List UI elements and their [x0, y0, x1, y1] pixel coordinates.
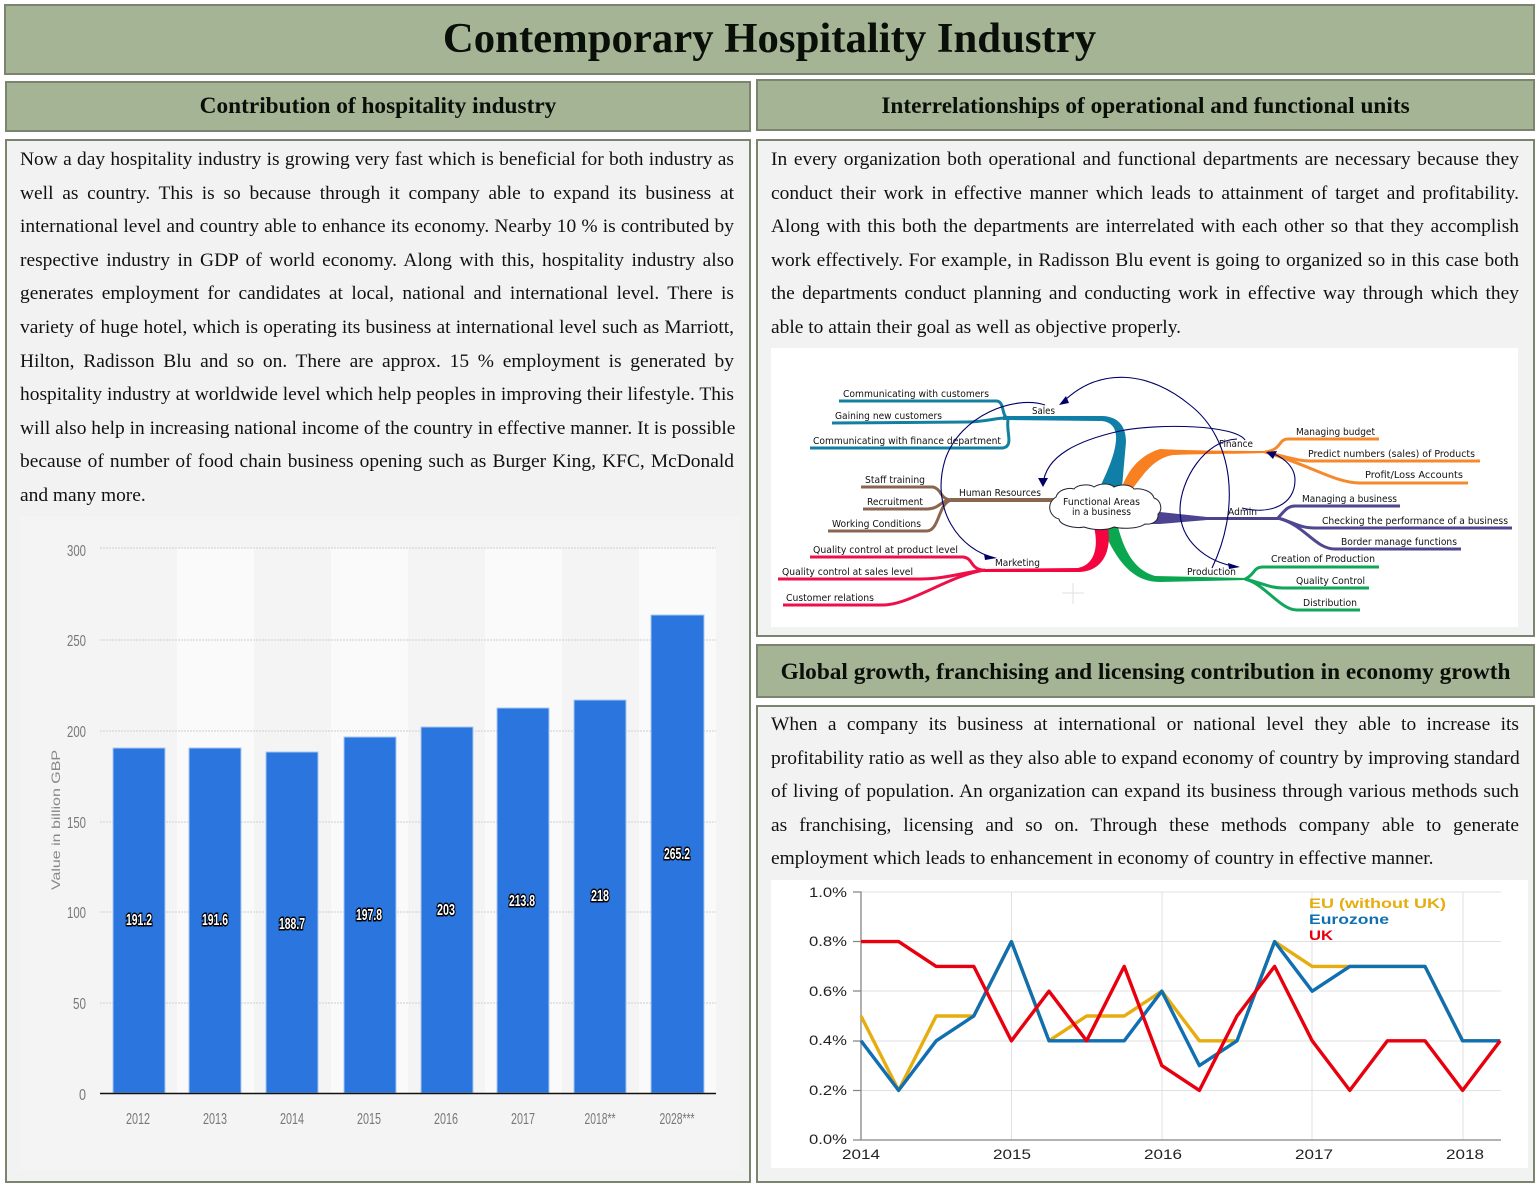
text block: contribution: and many more.: [20, 485, 146, 506]
x axis labels: 2016: [1144, 1147, 1182, 1162]
heading: interrelationships of units: Interrelationships of operational and functional units: [881, 92, 1410, 118]
text block: global growth: profitability ratio as well as they also able to expand economy of country by improving standard: [771, 748, 1520, 769]
y axis labels: 0.6%: [809, 984, 847, 999]
x axis labels: [842, 1147, 1484, 1162]
branch: marketing: Customer relations: [786, 593, 874, 604]
bar value labels: 218: [591, 888, 609, 905]
x axis labels: 2018**: [584, 1111, 616, 1128]
y axis labels: 0.8%: [809, 934, 847, 949]
y axis ticks: 100: [67, 905, 86, 922]
x axis labels: [126, 1111, 694, 1128]
y axis ticks: [67, 543, 86, 1104]
bars: [113, 615, 704, 1093]
y axis labels: 0.4%: [809, 1033, 847, 1048]
bar value labels: 191.2: [126, 912, 152, 929]
title: [4, 4, 1535, 75]
x axis labels: 2014: [280, 1111, 304, 1128]
branch: sales: Communicating with finance department: [813, 436, 1001, 447]
y axis labels: 0.2%: [809, 1083, 847, 1098]
text block: global growth: of living of population. An organization can expand its business through various methods such: [771, 781, 1519, 802]
text block: interrelationships: the departments conduct planning and conducting work in effective way through which they: [771, 283, 1519, 304]
x axis labels: 2013: [203, 1111, 227, 1128]
central cloud: Functional Areas: [1063, 497, 1140, 508]
legend: UK: [1309, 928, 1333, 943]
branch: admin: Managing a business: [1302, 494, 1397, 505]
text block: contribution: because of number of food chain business opening such as Burger King, KFC, McDonald: [20, 451, 734, 472]
text block: interrelationships: Along with this both the departments are interrelated with each other so that they accomplish: [771, 216, 1519, 237]
branch: human resources: [828, 475, 1060, 531]
text block: interrelationships: conduct their work in effective manner which leads to attainment of target and profitability.: [771, 183, 1519, 204]
x axis labels: 2012: [126, 1111, 150, 1128]
series: UK: [861, 942, 1500, 1090]
branch: production: Production: [1187, 567, 1236, 578]
branch: admin: [1135, 494, 1512, 549]
branch: production: Creation of Production: [1271, 554, 1375, 565]
branch: production: Quality Control: [1296, 576, 1365, 587]
panel: contribution body: [5, 139, 751, 1183]
text block: contribution: variety of huge hotel, which is operating its business at international level such as Marriott,: [20, 317, 734, 338]
branch: marketing: Quality control at sales level: [782, 567, 913, 578]
text block: interrelationships: work effectively. For example, in Radisson Blu event is going to organized so in this case both: [771, 250, 1519, 271]
branch: sales: Communicating with customers: [843, 389, 989, 400]
legend: [1309, 896, 1446, 943]
title: Contemporary Hospitality Industry: [443, 15, 1096, 62]
x axis labels: 2014: [842, 1147, 881, 1162]
series: EU without UK: [861, 942, 1500, 1090]
text block: interrelationships: [771, 149, 1519, 338]
y axis ticks: 50: [73, 996, 86, 1013]
legend: EU (without UK): [1309, 896, 1446, 911]
bar value labels: 203: [437, 902, 455, 919]
branch: production: Distribution: [1303, 598, 1357, 609]
x axis labels: 2017: [511, 1111, 535, 1128]
x axis labels: 2015: [357, 1111, 381, 1128]
y axis ticks: 200: [67, 724, 86, 741]
text block: contribution: well as country. This is so because through it company able to expand its business at: [20, 183, 734, 204]
bar value labels: [126, 846, 690, 933]
y axis ticks: 150: [67, 815, 86, 832]
text block: contribution: [20, 149, 735, 506]
branch: finance: Finance: [1219, 439, 1253, 450]
bar value labels: 213.8: [509, 893, 535, 910]
branch: human resources: Recruitment: [867, 497, 923, 508]
branch: finance: Profit/Loss Accounts: [1365, 470, 1463, 481]
heading: interrelationships of units: [756, 79, 1535, 131]
text block: global growth: as franchising, licensing and so on. Through these methods company able to generate: [771, 815, 1519, 836]
x axis labels: 2015: [993, 1147, 1031, 1162]
x axis labels: 2018: [1446, 1147, 1484, 1162]
branch: production: [1102, 527, 1379, 610]
series: Eurozone: [861, 942, 1500, 1090]
branch: human resources: Staff training: [865, 475, 925, 486]
y axis title: Value in billion GBP: [49, 750, 63, 890]
mind map: functional areas in a business: [771, 348, 1518, 627]
bar chart: value in billion GBP: [49, 543, 716, 1128]
branch: human resources: Human Resources: [959, 488, 1041, 499]
y axis ticks: 0: [79, 1087, 86, 1104]
panel: global growth body: [756, 705, 1535, 1183]
text block: contribution: Now a day hospitality industry is growing very fast which is beneficial for both industry as: [20, 149, 734, 170]
x axis labels: 2017: [1295, 1147, 1333, 1162]
y axis labels: 0.0%: [809, 1132, 847, 1147]
branch: admin: Checking the performance of a business: [1322, 516, 1508, 527]
y axis ticks: 250: [67, 633, 86, 650]
branch: marketing: [778, 527, 1109, 605]
branch: sales: Gaining new customers: [835, 411, 942, 422]
branch: finance: Predict numbers (sales) of Products: [1308, 449, 1475, 460]
text block: contribution: hospitality industry at worldwide level which help peoples in improving their lifestyle. This: [20, 384, 734, 405]
heading: global growth: Global growth, franchising and licensing contribution in economy growth: [781, 658, 1510, 684]
bar value labels: 188.7: [279, 916, 305, 933]
branch: admin: Border manage functions: [1341, 537, 1457, 548]
x axis labels: 2028***: [660, 1111, 694, 1128]
text block: global growth: employment which leads to enhancement in economy of country in effective manner.: [771, 848, 1433, 869]
y axis labels: 1.0%: [809, 885, 847, 900]
bar value labels: 265.2: [664, 846, 690, 863]
central cloud: [1050, 484, 1161, 530]
x axis labels: 2016: [434, 1111, 458, 1128]
heading: global growth: [756, 644, 1535, 698]
line chart: growth 2014-2018: [771, 880, 1528, 1168]
y axis labels: [809, 885, 847, 1147]
branch: human resources: Working Conditions: [832, 519, 921, 530]
panel: interrelationships body: [756, 139, 1535, 637]
branch: sales: Sales: [1032, 406, 1055, 417]
text block: contribution: will also help in increasing national income of the country in effective manner. It is possible: [20, 418, 735, 439]
text block: global growth: [771, 714, 1520, 869]
heading: contribution of hospitality industry: Contribution of hospitality industry: [200, 93, 556, 119]
bar value labels: 191.6: [202, 912, 228, 929]
bar value labels: 197.8: [356, 907, 382, 924]
legend: Eurozone: [1309, 912, 1390, 927]
branch: finance: [1122, 427, 1480, 488]
text block: interrelationships: In every organization both operational and functional departments are necessary because they: [771, 149, 1519, 170]
central cloud: in a business: [1072, 507, 1131, 518]
axes: [853, 892, 1501, 1140]
branch: sales: [810, 389, 1126, 487]
text block: interrelationships: able to attain their goal as well as objective properly.: [771, 317, 1181, 338]
text block: contribution: respective industry in GDP of world economy. Along with this, hospitality industry also: [20, 250, 734, 271]
text block: global growth: When a company its business at international or national level they able to increase its: [771, 714, 1519, 735]
text block: contribution: Hilton, Radisson Blu and so on. There are approx. 15 % employment is generated by: [20, 351, 734, 372]
branch: marketing: Marketing: [995, 558, 1040, 569]
heading: contribution of hospitality industry: [5, 81, 751, 132]
branch: admin: Admin: [1228, 507, 1257, 518]
branch: finance: Managing budget: [1296, 427, 1375, 438]
text block: contribution: international level and country able to enhance its economy. Nearby 10 % is contributed by: [20, 216, 734, 237]
relationship arrows: [941, 377, 1295, 569]
y axis ticks: 300: [67, 543, 86, 560]
branch: marketing: Quality control at product level: [813, 545, 958, 556]
text block: contribution: generates employment for candidates at local, national and international level. There is: [20, 283, 734, 304]
